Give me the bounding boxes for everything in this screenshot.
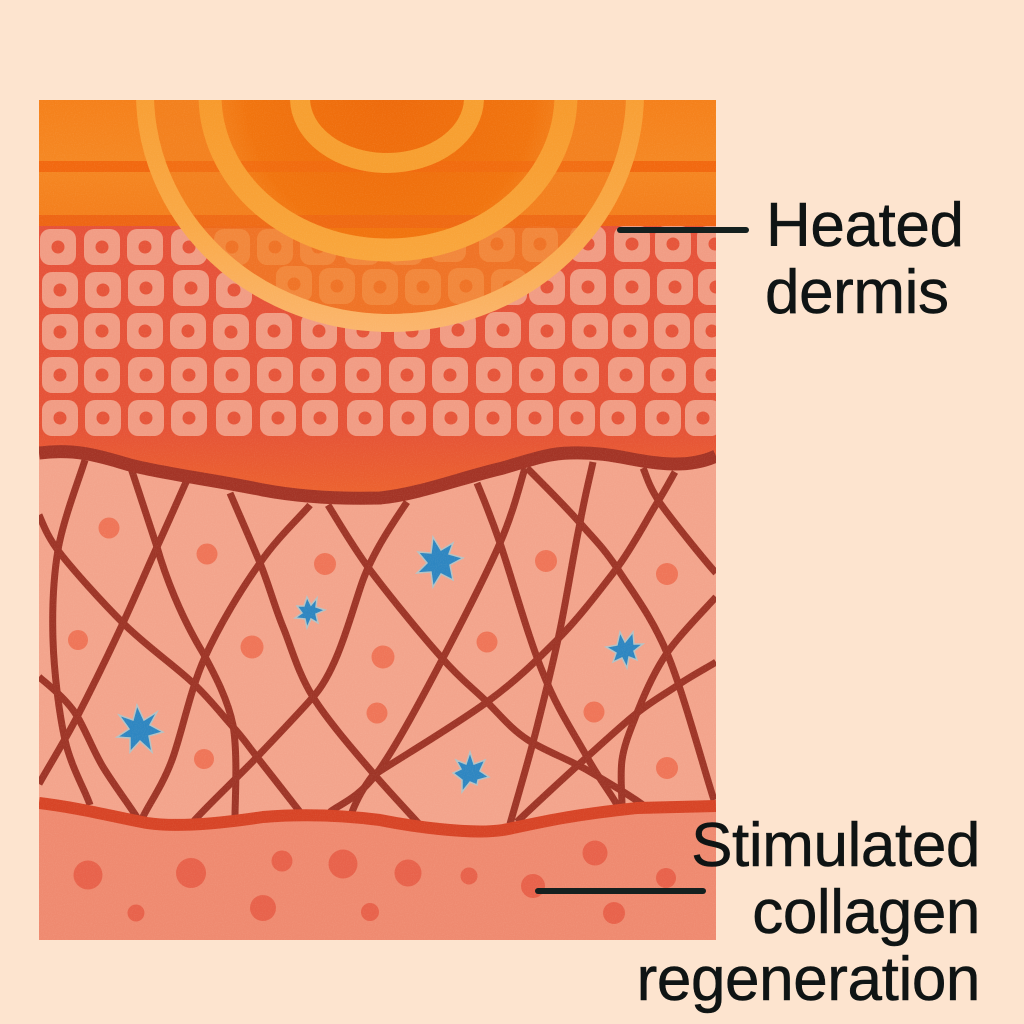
label: heated dermis: Heated <box>766 191 964 260</box>
collagen fibres <box>39 460 716 825</box>
star 2 <box>295 597 325 628</box>
ring: middle <box>198 100 578 262</box>
heat glow over cells <box>202 226 578 314</box>
star 3 <box>117 705 163 752</box>
leader line: stimulated collagen <box>538 888 703 894</box>
ring: inner <box>290 100 484 173</box>
ring: outer <box>136 100 644 332</box>
heat core <box>231 100 548 238</box>
wave: dermis bottom boundary <box>39 803 716 831</box>
wave: dermis top boundary <box>39 452 716 498</box>
redrawn dark bands inside the heat zone <box>145 161 635 228</box>
leader line: heated dermis <box>620 227 746 233</box>
heat rings <box>136 100 644 332</box>
callout: heated dermis <box>620 191 964 327</box>
label: stimulated collagen regeneration: collagen <box>752 878 980 947</box>
layer: heated upper skin band <box>39 100 716 230</box>
panel: skin cross-section <box>39 100 716 940</box>
lower dots <box>74 840 676 924</box>
star 4 <box>606 632 643 668</box>
layer: dermis <box>39 452 716 840</box>
fibroblast stars <box>117 537 643 792</box>
paper grain <box>39 100 716 940</box>
label: stimulated collagen regeneration: Stimulated <box>691 811 980 880</box>
star 1 <box>417 537 463 587</box>
layer: lower subcutis <box>39 805 716 940</box>
layer: epidermal cell grid <box>39 226 716 492</box>
star 5 <box>453 752 489 792</box>
label: heated dermis: dermis <box>765 258 949 327</box>
dermis dots <box>68 518 678 779</box>
label: stimulated collagen regeneration: regeneration <box>637 945 980 1014</box>
callout: stimulated collagen regeneration <box>538 811 980 1014</box>
